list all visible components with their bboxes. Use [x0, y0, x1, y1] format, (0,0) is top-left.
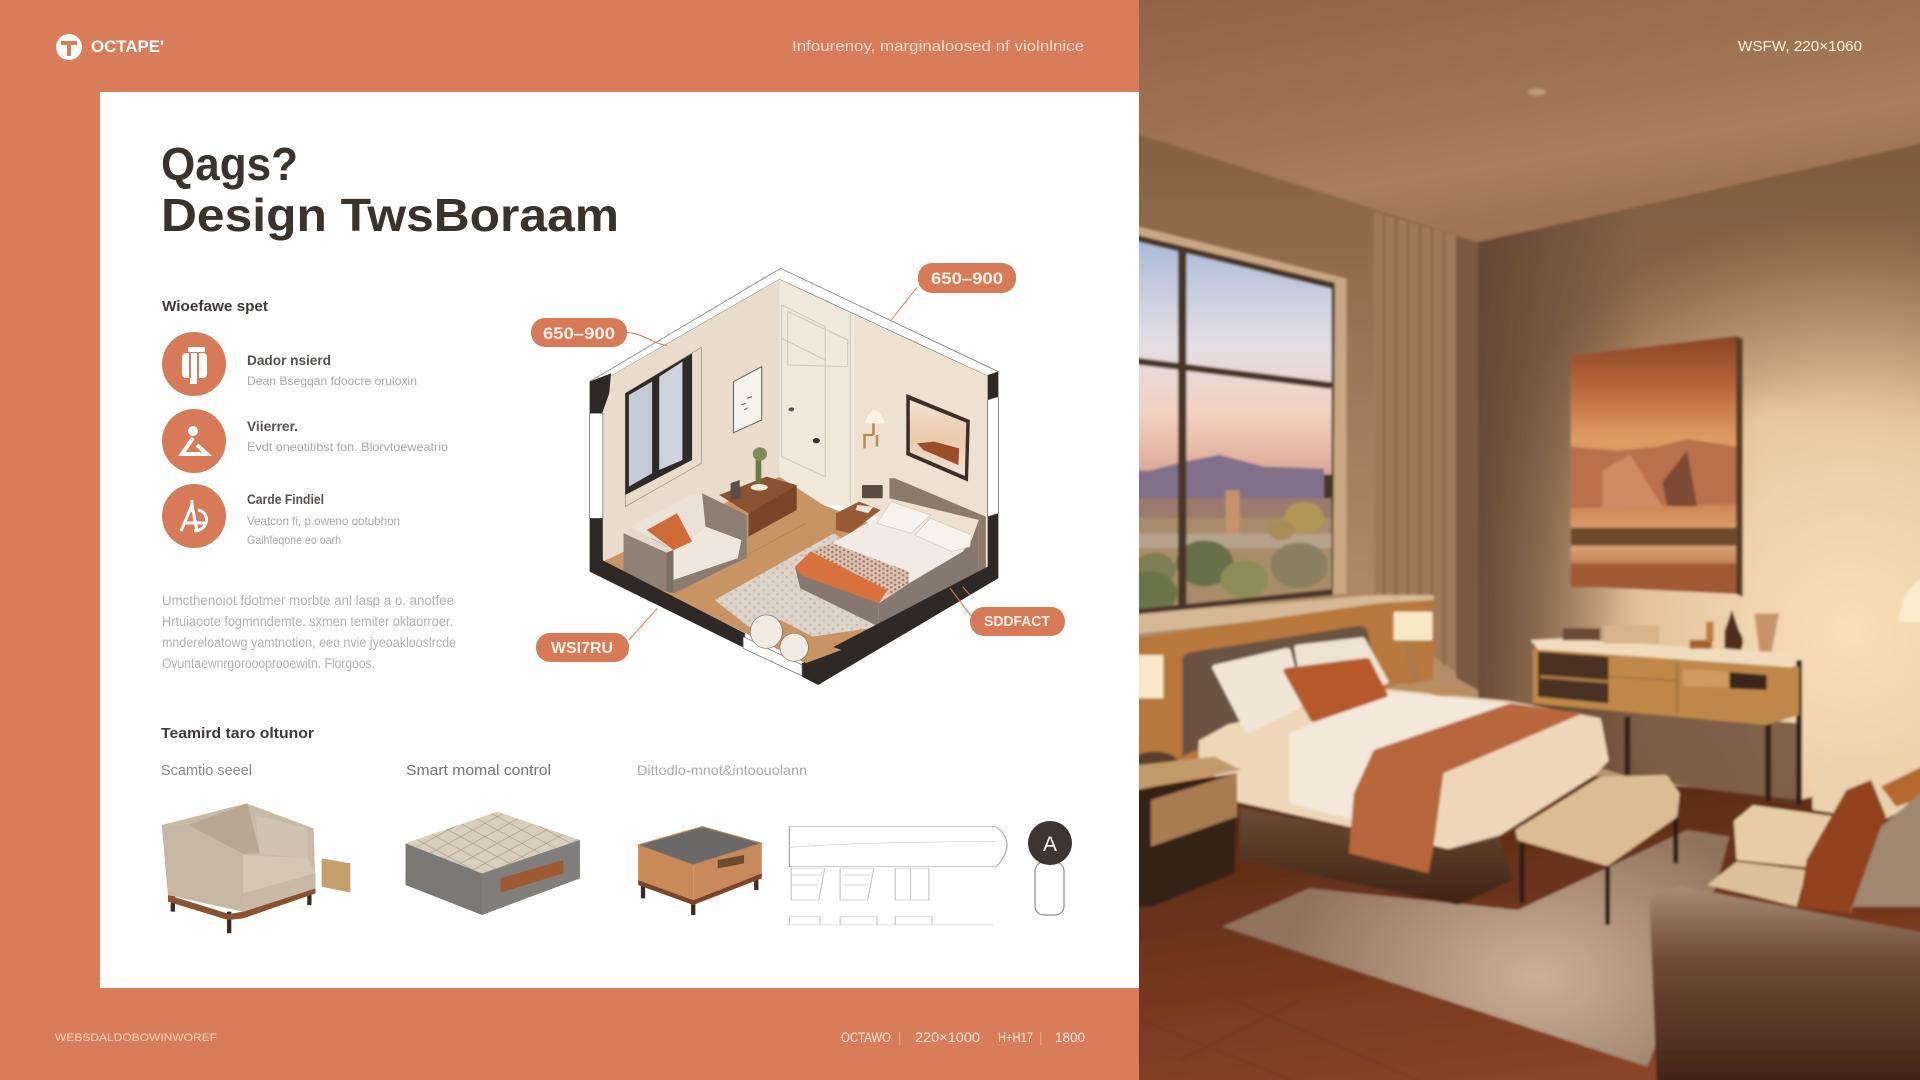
logo [56, 34, 164, 60]
painting [1571, 336, 1743, 597]
right wall lamp [1899, 577, 1920, 623]
furniture: armchair [162, 803, 350, 933]
icon: letter mark [162, 484, 226, 548]
panel: bedroom photo [1110, 0, 1920, 1080]
left wall [603, 279, 780, 562]
left lamp [1139, 652, 1178, 766]
title: Design TwsBoraam [161, 189, 619, 241]
dresser [719, 447, 797, 537]
callout: bottom right [970, 607, 1065, 636]
left nightstand [1139, 756, 1240, 908]
upper room objects [1110, 219, 1743, 621]
isometric room diagram [590, 268, 998, 685]
desk decor [1563, 610, 1779, 652]
throw blanket [1349, 703, 1583, 873]
bed base [1239, 807, 1513, 905]
footer right: 1800 [1055, 1029, 1085, 1045]
furniture: side table [638, 827, 762, 915]
rug [715, 533, 909, 637]
body paragraph: Ovuntaewnrgoroooprooewitn. Florgoos. [162, 656, 375, 671]
side columns [590, 397, 998, 518]
entry chairs [743, 615, 841, 676]
panel: white content card [100, 92, 1140, 988]
rug [1222, 830, 1729, 1067]
label: armchair: Scamtio seeel [161, 763, 252, 779]
bed [795, 478, 986, 627]
terracotta background [0, 0, 1140, 1080]
footer right [841, 1029, 1085, 1045]
body paragraph [162, 593, 456, 671]
material swatch [322, 858, 350, 893]
headboard [1182, 626, 1374, 757]
right lamp [1394, 612, 1432, 678]
ceiling light [1528, 88, 1546, 96]
nightstand [836, 485, 883, 533]
right nightstand [1391, 683, 1468, 696]
floor planks [1140, 960, 1440, 1080]
floor [1110, 760, 1920, 1080]
window [1139, 225, 1348, 615]
desk [1530, 638, 1802, 805]
back wall [780, 279, 854, 507]
callout: left: 650–900 [543, 324, 615, 343]
callout: bottom right: SDDFACT [984, 613, 1050, 630]
callout: bottom left: WSI7RU [551, 640, 613, 657]
window sill [1110, 595, 1433, 637]
lower room objects [1110, 577, 1920, 1080]
right wall [1476, 142, 1920, 802]
wall art small [733, 367, 762, 433]
callout: top right [918, 263, 1016, 293]
feature item 1: Dador nsierd [247, 352, 331, 368]
feature item 3: Veatcon fi, p oweno ootubhon [247, 514, 400, 528]
footer right: | [898, 1029, 902, 1045]
icon: column [162, 332, 226, 396]
feature item 1 [162, 332, 417, 396]
photo caption: WSFW, 220×1060 [1738, 39, 1862, 55]
window view [1139, 240, 1334, 610]
body paragraph: Umcthenoiot fdotmer morbte anl lasp a o. anotfee [162, 593, 454, 608]
label: side table: Dittodlo-mnot&intoouolann [637, 762, 807, 778]
footer right: 220×1000 [915, 1029, 980, 1045]
callout: left [531, 318, 627, 347]
callout: bottom left [536, 633, 629, 662]
window [625, 347, 701, 507]
pillows [1216, 640, 1385, 730]
logo: OCTAPE' [91, 37, 164, 56]
feature item 3 [162, 484, 400, 548]
framed picture [906, 394, 970, 482]
sofa [624, 493, 747, 593]
callout lines [627, 287, 972, 640]
furniture: ottoman [405, 812, 580, 915]
floor [603, 477, 988, 663]
feature item 2: Viierrer. [247, 418, 298, 434]
feature item 2 [162, 409, 448, 473]
icon: figure [162, 409, 226, 473]
door [782, 305, 850, 503]
footer right: OCTAWO [841, 1029, 891, 1045]
callout: top right: 650–900 [931, 269, 1003, 288]
ceiling frame [590, 268, 998, 382]
body paragraph: mndereloatowg yamtnotion, eeo nvie jyeoaklooslrcde [162, 635, 456, 650]
ceiling [1110, 0, 1920, 242]
footer right: H+H17 [998, 1029, 1033, 1045]
feature item 3: Carde Findiel [247, 491, 324, 507]
title [161, 138, 619, 241]
title: Qags? [161, 138, 298, 190]
bench [1519, 777, 1676, 925]
feature item 3: Galhfeqone eo oarh [247, 533, 341, 547]
bed wall panel [1139, 598, 1434, 762]
dark base walls [590, 372, 998, 685]
footer left: WEBSDALDOBOWINWOREF [55, 1032, 217, 1044]
desk wall shadow [1533, 703, 1802, 805]
right wall [854, 315, 988, 570]
label: ottoman: Smart momal control [406, 763, 551, 779]
icon: dark badge with remote [1028, 821, 1072, 915]
feature item 1: Dean Bsegqan fdoocre oruloxin [247, 374, 417, 388]
armchair [1650, 759, 1920, 1080]
left wall [1139, 132, 1479, 698]
heading: feature list: Wioefawe spet [162, 298, 268, 315]
heading: materials: Teamird taro oltunor [161, 725, 314, 742]
header tagline: Infourenoy, marginaloosed nf violnlnice [792, 38, 1084, 55]
mattress [1202, 692, 1605, 847]
technical sketch [785, 827, 1007, 925]
icon: dark badge with remote: A [1043, 833, 1057, 856]
footer right: | [1039, 1029, 1043, 1045]
feature item 2: Evdt oneotitibst fon. Blorvtoeweatrio [247, 440, 448, 454]
curtain [1374, 212, 1478, 690]
wall lamp [865, 410, 885, 448]
body paragraph: Hrtuiaoote fogmnndemte. sxmen temiter oklaorroer. [162, 614, 453, 629]
